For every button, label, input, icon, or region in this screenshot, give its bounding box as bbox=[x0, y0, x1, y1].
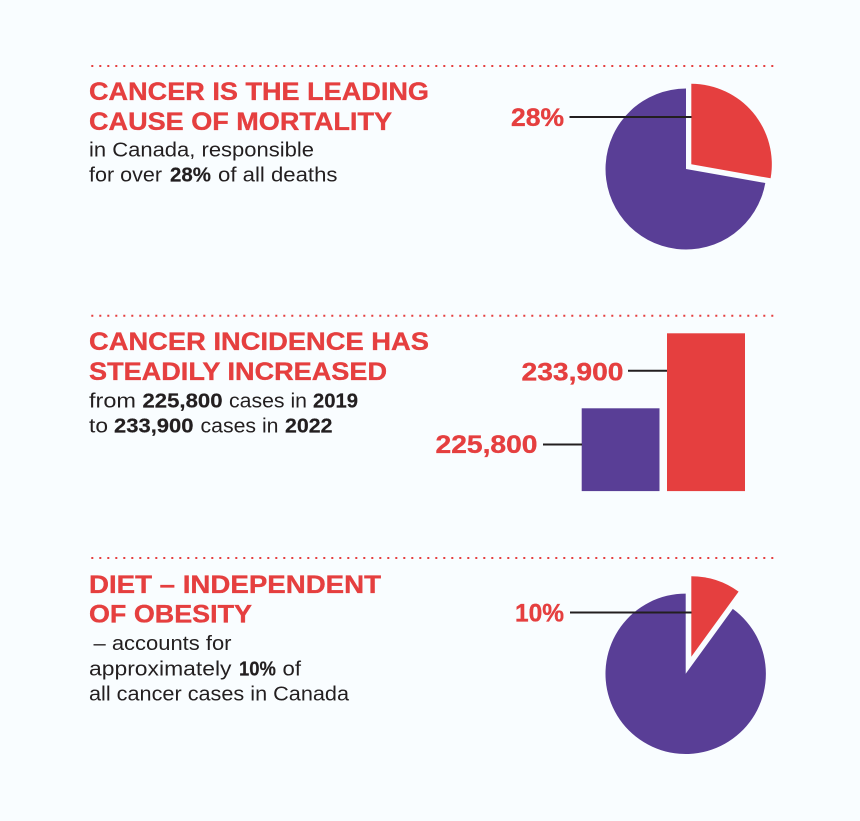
panel: cancer incidence bbox=[89, 328, 745, 491]
text block: diet description: approximately bbox=[89, 658, 232, 680]
text block: mortality description: for over bbox=[89, 164, 162, 186]
text block: mortality description: of all deaths bbox=[218, 164, 338, 186]
text block: incidence description: 233,900 bbox=[114, 416, 194, 438]
text block: incidence description bbox=[89, 390, 358, 438]
heading: cancer incidence has steadily increased bbox=[89, 328, 429, 386]
text block: incidence description: cases in bbox=[229, 390, 307, 412]
callout: 28%: 28% bbox=[511, 104, 564, 132]
callout: 10%: 10% bbox=[515, 600, 564, 628]
text block: mortality description: 28% bbox=[170, 164, 211, 186]
heading: cancer is the leading cause of mortality: CANCER IS THE LEADING bbox=[89, 78, 429, 106]
panel: leading cause of mortality bbox=[89, 78, 772, 250]
text block: incidence description: cases in bbox=[200, 416, 278, 438]
pie chart: 10 percent of cases bbox=[605, 576, 766, 754]
text block: diet description: – accounts for bbox=[94, 633, 232, 655]
text block: incidence description: from bbox=[89, 390, 136, 412]
heading: cancer is the leading cause of mortality: CAUSE OF MORTALITY bbox=[89, 108, 392, 136]
heading: diet independent of obesity: OF OBESITY bbox=[89, 600, 252, 628]
heading: cancer is the leading cause of mortality bbox=[89, 78, 429, 136]
text block: incidence description: 225,800 bbox=[142, 390, 222, 412]
text block: mortality description bbox=[89, 140, 338, 186]
text block: diet description bbox=[89, 633, 350, 706]
heading: diet independent of obesity: DIET – INDEPENDENT bbox=[89, 571, 381, 599]
callout: 233,900: 233,900 bbox=[522, 358, 624, 386]
pie chart: 28 percent of deaths bbox=[606, 84, 772, 250]
text block: incidence description: 2019 bbox=[313, 390, 358, 412]
text block: incidence description: to bbox=[89, 416, 108, 438]
text block: diet description: of bbox=[282, 658, 301, 680]
heading: diet independent of obesity bbox=[89, 571, 381, 628]
text block: diet description: 10% bbox=[239, 658, 276, 680]
panel: diet independent of obesity bbox=[89, 571, 766, 754]
heading: cancer incidence has steadily increased: CANCER INCIDENCE HAS bbox=[89, 328, 429, 356]
text block: mortality description: in Canada, responsible bbox=[89, 140, 314, 162]
text block: diet description: all cancer cases in Canada bbox=[89, 684, 350, 706]
text block: incidence description: 2022 bbox=[285, 416, 332, 438]
heading: cancer incidence has steadily increased: STEADILY INCREASED bbox=[89, 358, 387, 386]
bar chart: 2019 vs 2022 cases bbox=[582, 333, 745, 491]
callout: 225,800: 225,800 bbox=[436, 431, 538, 459]
